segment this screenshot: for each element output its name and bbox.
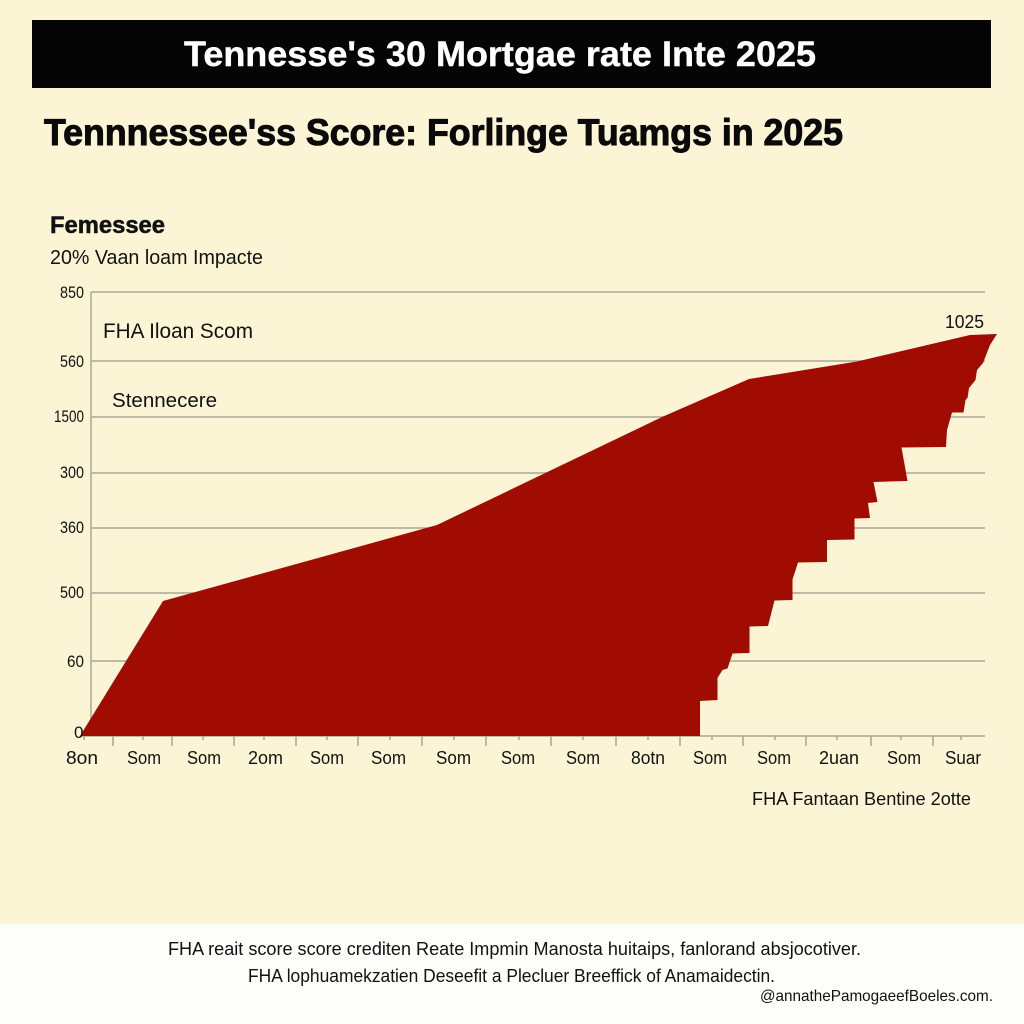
red area series	[80, 334, 997, 736]
y-axis labels: 1500	[54, 407, 84, 426]
x-axis labels	[66, 747, 981, 768]
x-axis labels: Som	[187, 747, 221, 768]
x-axis labels: Som	[436, 747, 471, 768]
footer text: FHA lophuamekzatien Deseefit a Plecluer Breeffick of Anamaidectin.	[248, 965, 775, 986]
x-axis labels: Som	[566, 747, 600, 768]
x-axis labels: 2om	[248, 747, 283, 768]
x-axis labels: Som	[693, 747, 727, 768]
footer text: @annathePamogaeefBoeles.com.	[760, 988, 993, 1005]
chart subheading: Femessee	[50, 212, 165, 239]
y-axis labels: 60	[67, 652, 84, 671]
y-axis labels: 500	[60, 583, 84, 602]
x-axis labels: Som	[371, 747, 406, 768]
y-axis labels: 850	[60, 283, 84, 302]
chart description: 20% Vaan loam Impacte	[50, 247, 263, 269]
end value label: 1025	[945, 312, 984, 332]
series label: Tennessee: Stennecere	[112, 390, 217, 412]
x-axis labels: Som	[887, 747, 921, 768]
x-axis labels: Suar	[945, 747, 981, 768]
series label: FHA loan score: FHA Iloan Scom	[103, 320, 253, 343]
y-axis labels	[54, 283, 84, 742]
title banner: Tennesse's 30 Mortgae rate Inte 2025	[184, 35, 816, 74]
footer band	[0, 924, 1024, 1024]
footer text: FHA reait score score crediten Reate Impmin Manosta huitaips, fanlorand absjocotiver.	[168, 938, 861, 959]
grid lines and axes	[80, 292, 985, 746]
title banner	[32, 20, 991, 88]
x-axis labels: Som	[501, 747, 535, 768]
y-axis labels: 300	[60, 463, 84, 482]
y-axis labels: 0	[74, 723, 83, 742]
x-axis labels: 8otn	[631, 747, 665, 768]
y-axis labels: 560	[60, 352, 84, 371]
area chart	[54, 283, 997, 768]
footer text	[168, 938, 993, 1005]
x-axis labels: Som	[127, 747, 161, 768]
x-axis labels: 8on	[66, 747, 98, 768]
x-axis labels: Som	[757, 747, 791, 768]
chart source note: FHA Fantaan Bentine 2otte	[752, 788, 971, 809]
main heading: Tennnessee'ss Score: Forlinge Tuamgs in 2025	[44, 112, 843, 153]
x-axis labels: 2uan	[819, 747, 859, 768]
y-axis labels: 360	[60, 518, 84, 537]
x-axis labels: Som	[310, 747, 344, 768]
